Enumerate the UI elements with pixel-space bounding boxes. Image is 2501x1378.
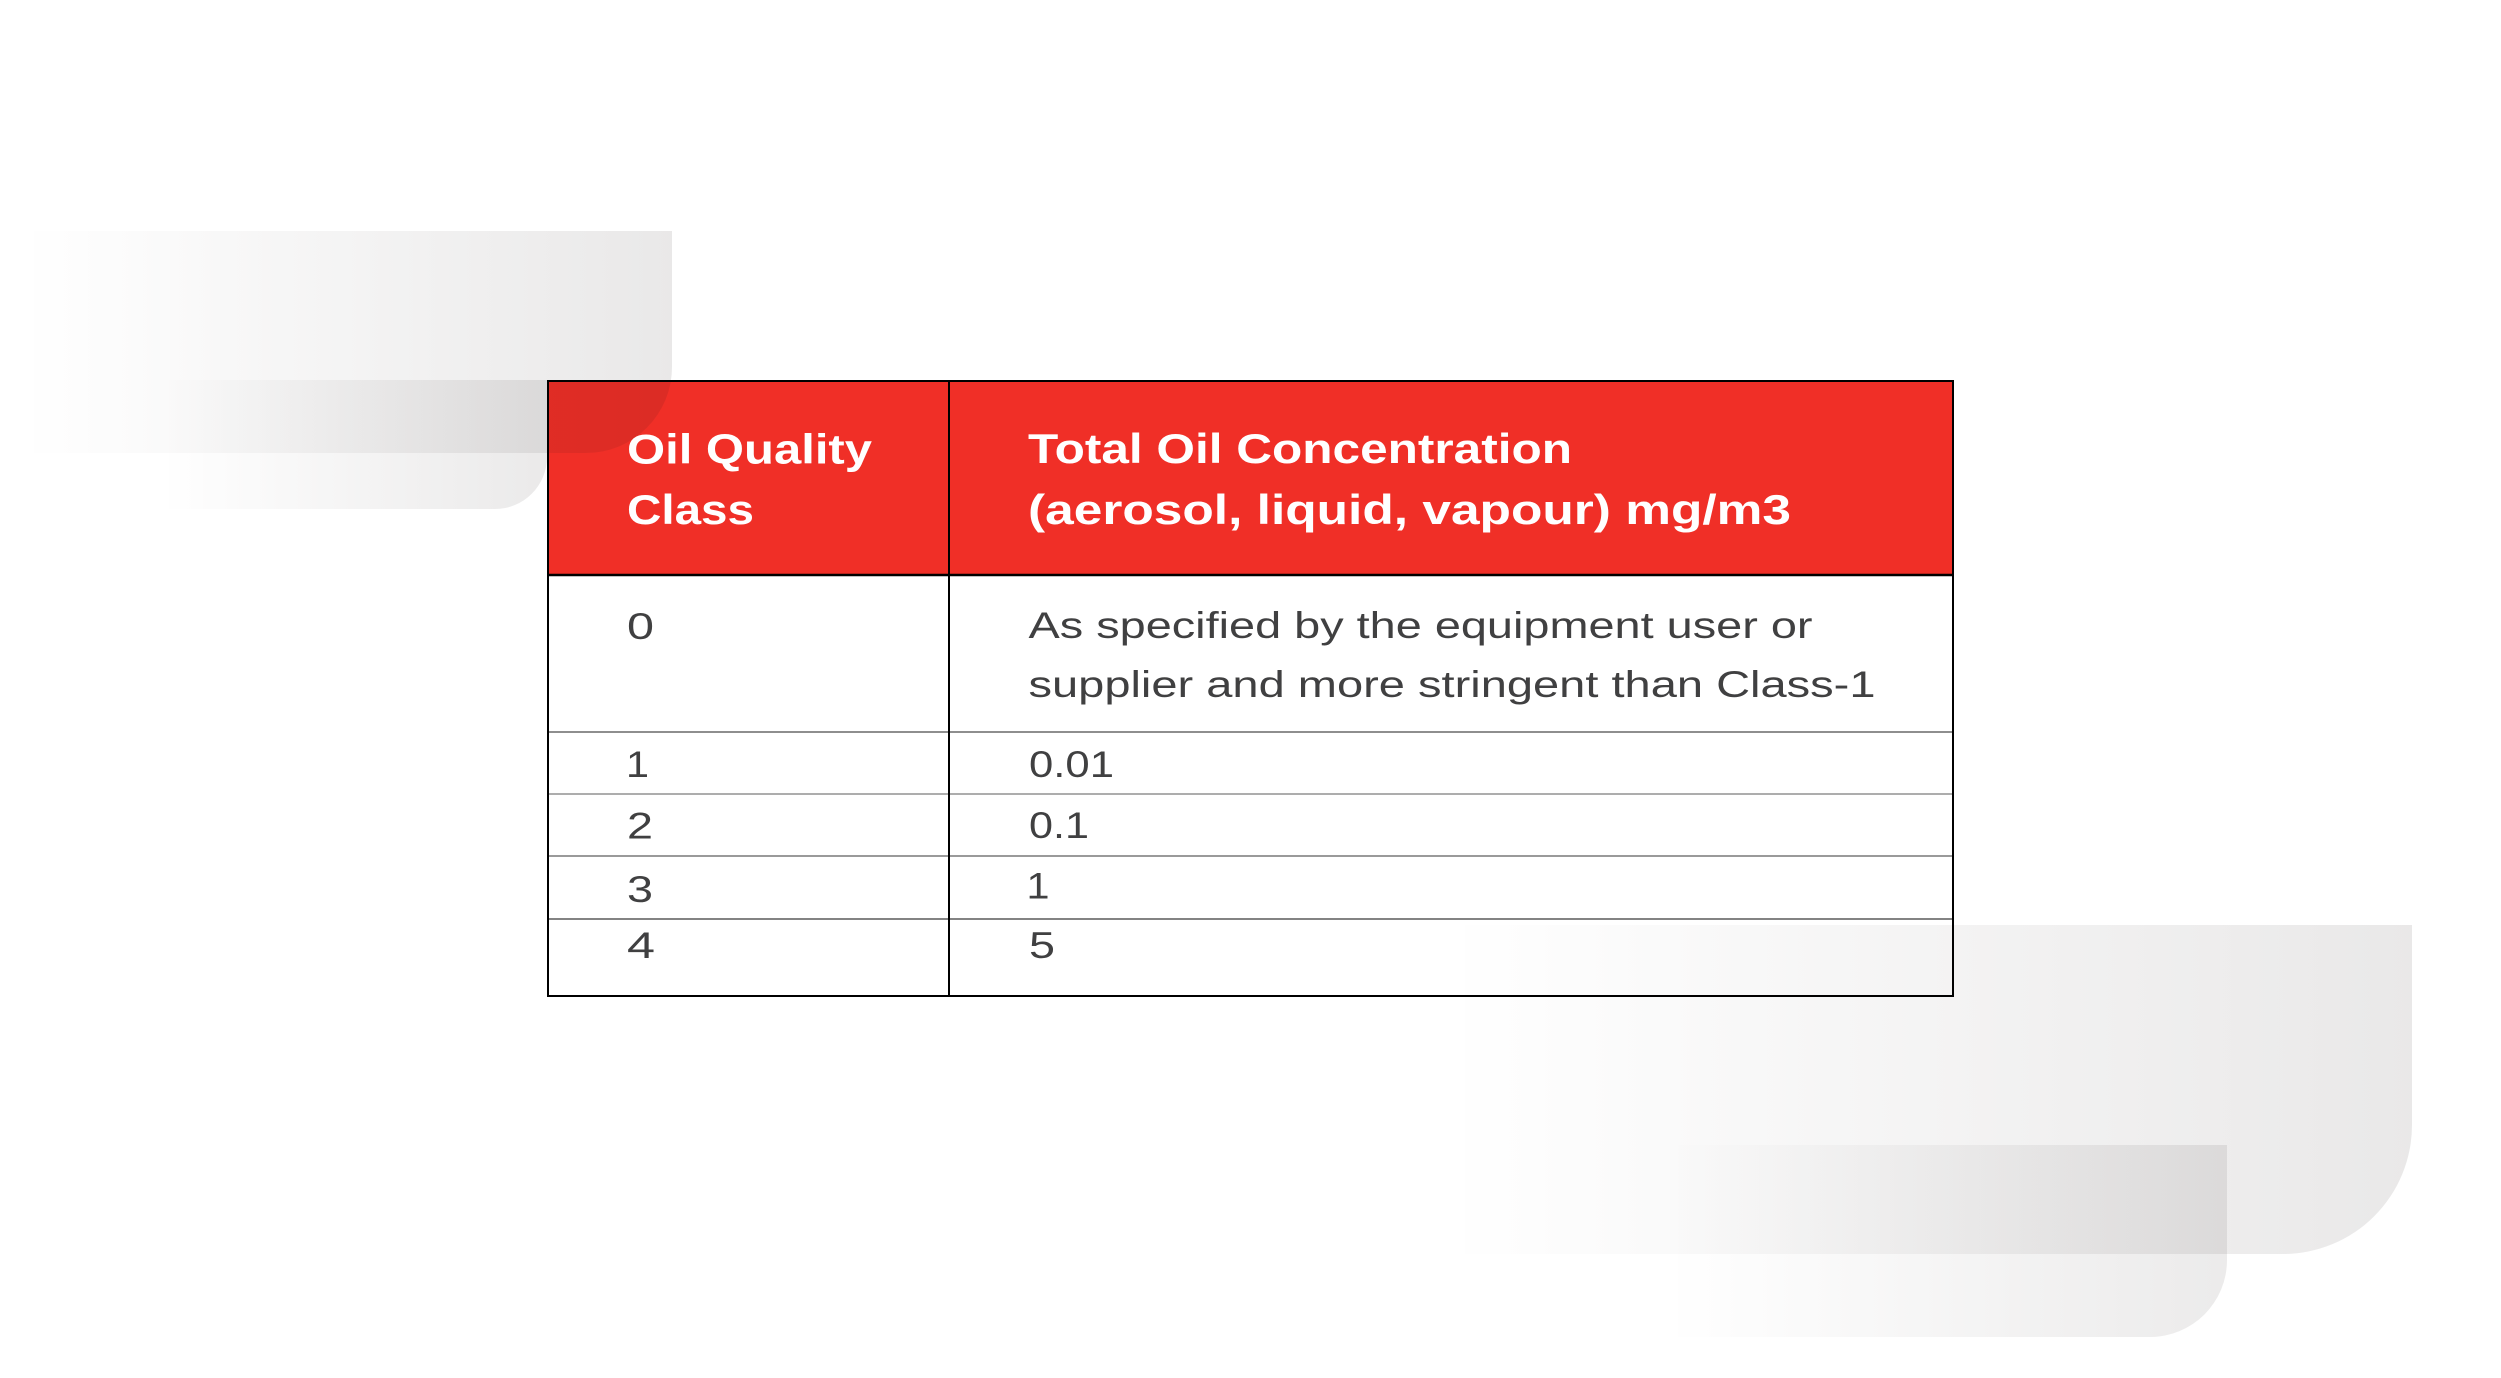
decorative shape: top-left small — [160, 380, 547, 509]
row: class 2 — [627, 805, 1089, 846]
decorative shape: top-left large — [20, 231, 672, 453]
row: class 2: 0.1 — [1029, 805, 1089, 846]
row: class 0 — [627, 605, 1876, 705]
header: total oil concentration — [1028, 425, 1791, 533]
row: class 4: 4 — [627, 925, 655, 966]
table text — [626, 425, 1876, 966]
header: total oil concentration: (aerosol, liquid, vapour) mg/m3 — [1028, 486, 1791, 533]
row: class 1: 1 — [626, 744, 649, 785]
table grid — [548, 381, 1953, 996]
row: class 1: 0.01 — [1029, 744, 1114, 785]
row: class 0: As specified by the equipment user or — [1028, 605, 1812, 646]
row: class 0: 0 — [627, 606, 654, 647]
row: class 1 — [626, 744, 1114, 785]
row: class 4 — [627, 925, 1055, 966]
header: total oil concentration: Total Oil Concentration — [1028, 425, 1572, 472]
row: class 2: 2 — [627, 806, 653, 846]
header: oil quality class: Oil Quality — [627, 426, 873, 472]
row: class 4: 5 — [1029, 925, 1055, 966]
decorative shape: bottom-right large — [1445, 925, 2412, 1254]
decorative shape: bottom-right small — [1665, 1145, 2227, 1337]
header: oil quality class: Class — [627, 486, 754, 533]
row: class 0: supplier and more stringent than Class-1 — [1028, 664, 1876, 705]
row: class 3: 1 — [1026, 866, 1050, 906]
row: class 3 — [627, 866, 1050, 910]
header: oil quality class — [627, 426, 873, 533]
row: class 3: 3 — [627, 869, 653, 910]
